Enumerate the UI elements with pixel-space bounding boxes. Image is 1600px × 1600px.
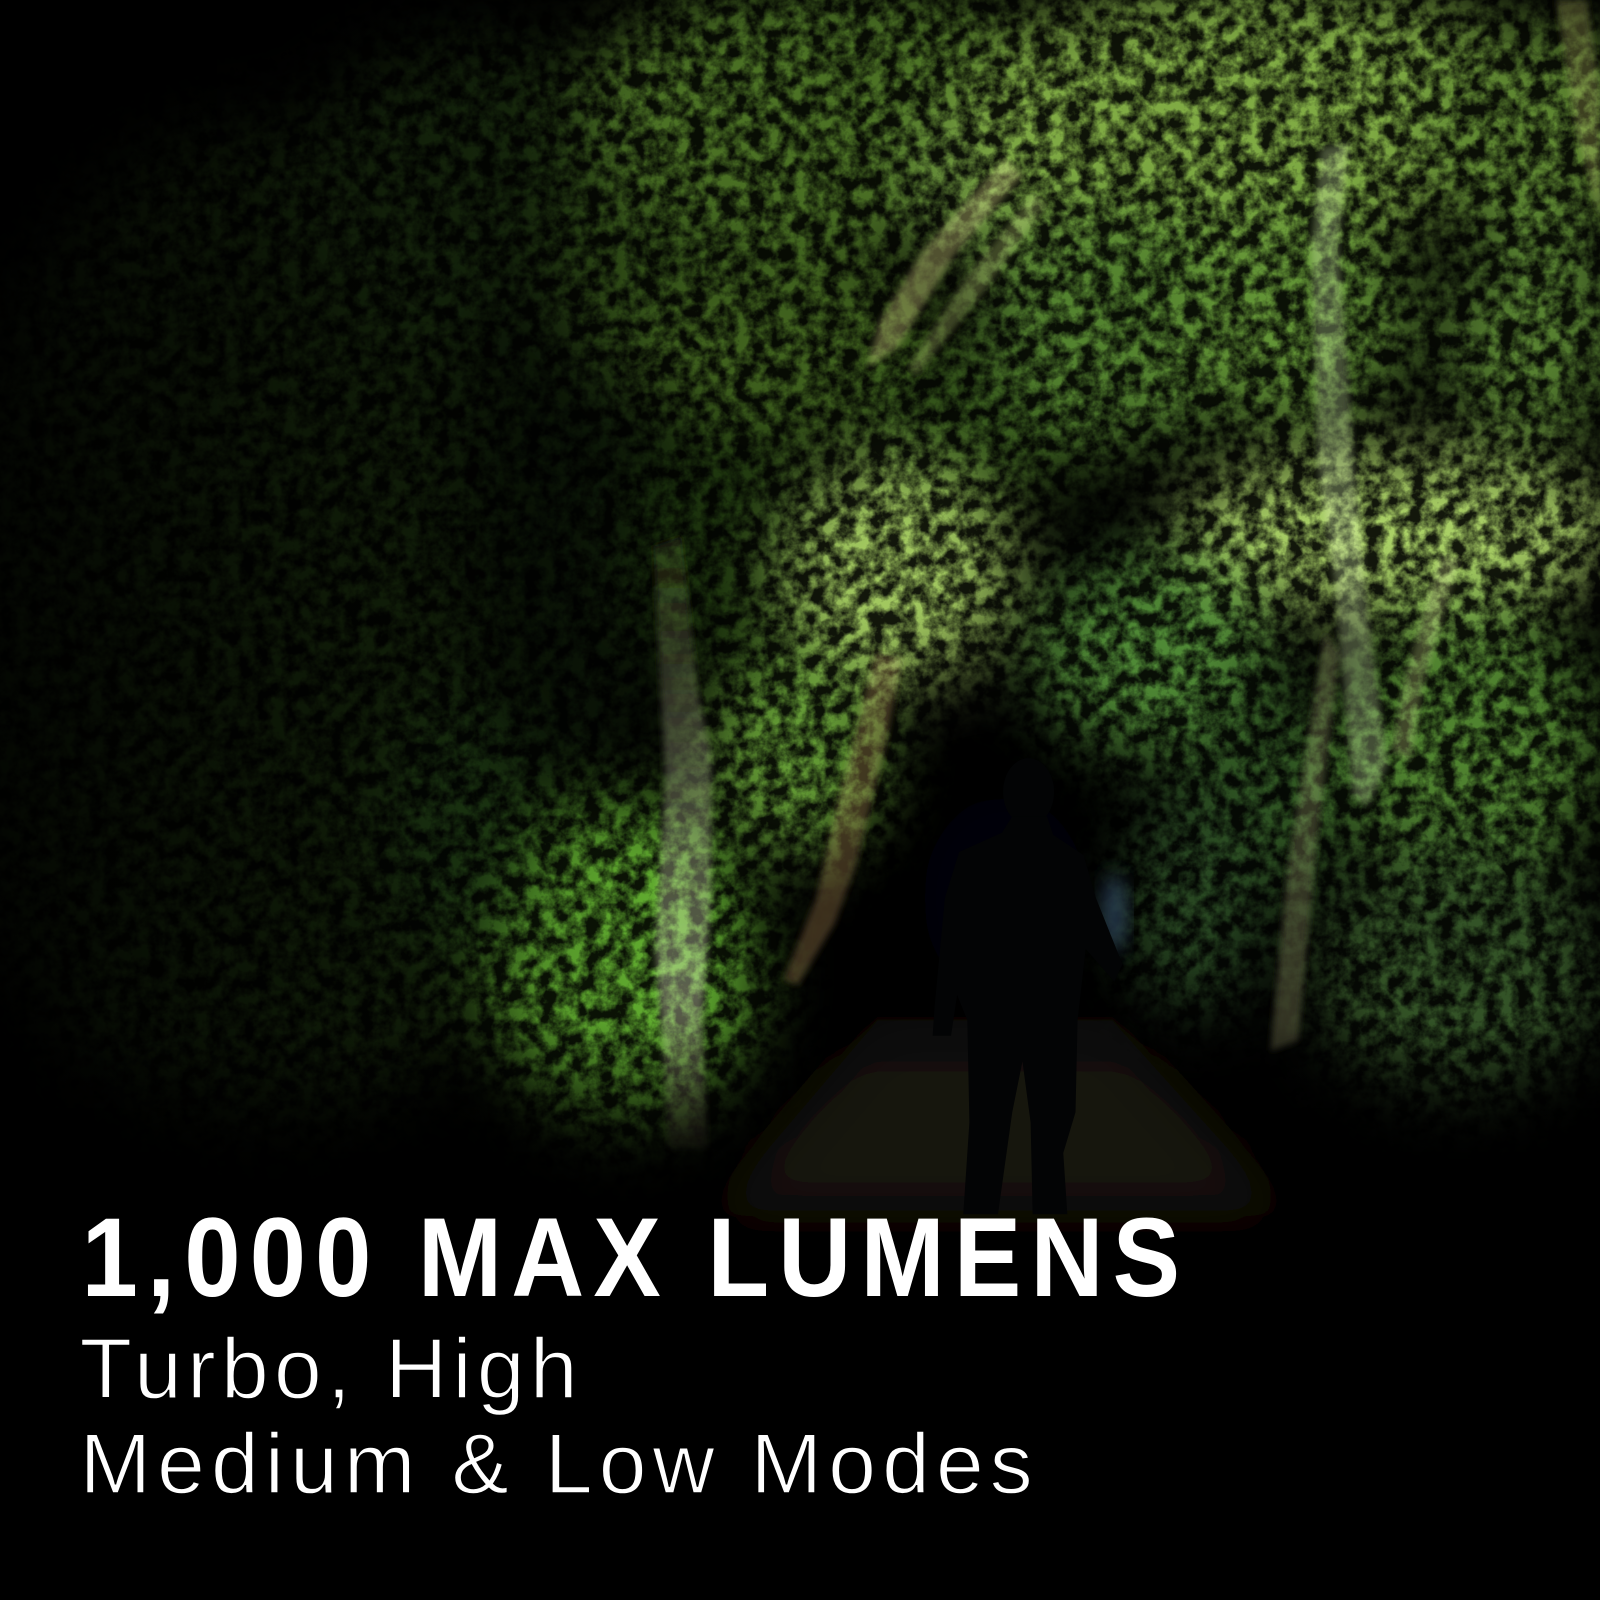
upper branch: second [908,194,1046,376]
tree trunks [653,0,1600,1148]
solid black base [0,1239,1600,1600]
upper branch: main [867,158,1022,367]
blue glow beside the figure [1102,874,1127,952]
head [1003,758,1054,826]
trunk: centre leaning [784,653,902,985]
trunk: right branch [1392,556,1459,760]
subtitle line 1: Turbo, High [80,1321,578,1417]
trunk: top right corner [1556,0,1600,219]
subtitle line 2: Medium & Low Modes [80,1416,1033,1512]
silhouette of a person [933,758,1122,1214]
subtitle [80,1321,1033,1512]
left side darkness [0,0,653,1600]
trunk: right thin [1270,633,1340,1051]
path on the ground [704,1020,1296,1224]
bottom fade to black [0,1020,1600,1240]
trunk: left foreground [653,536,711,1148]
trunk: right main [1311,143,1388,806]
dark gap behind the figure [923,796,1087,1000]
body [933,816,1122,1214]
headline: 1,000 MAX LUMENS [82,1194,1180,1320]
